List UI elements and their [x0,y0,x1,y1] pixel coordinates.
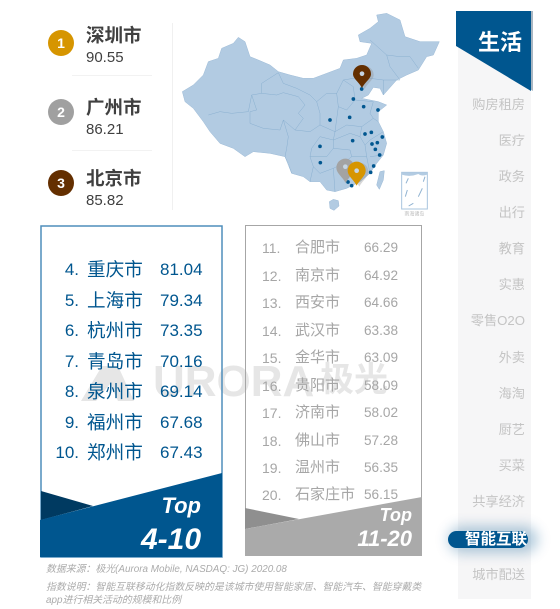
menu item: 零售O2O [471,313,525,328]
active menu pill: 智能互联 [465,531,527,548]
row 8 [65,381,203,402]
pin: Shenzhen [348,162,368,187]
row 6 [65,320,203,341]
menu item: 外卖 [499,350,525,365]
row 12: 64.92 [364,268,398,283]
row 5: 79.34 [160,291,203,310]
active category label: 生活 [478,30,522,55]
row 17 [262,404,398,421]
row 12 [262,267,398,284]
row 18: 佛山市 [295,432,340,449]
row 14 [262,322,398,339]
menu item: 城市配送 [472,567,525,582]
index note: 指数说明：智能互联移动化指数反映的是该城市使用智能家居、智能汽车、智能穿戴类 [46,582,421,593]
source note: 数据来源：极光(Aurora Mobile, NASDAQ: JG) 2020.08 [46,564,287,575]
row 13: 13. [262,295,281,311]
row 16: 16. [262,378,281,394]
index note: app进行相关活动的规模和比例 [46,594,181,606]
rank 3 city: 北京市 [86,168,142,189]
row 6: 73.35 [160,321,203,340]
label: Top: Top [162,493,201,518]
menu item: 买菜 [499,458,525,473]
rank 1 city: 深圳市 [86,25,142,46]
row 13: 64.66 [364,295,398,310]
menu item: 海淘 [499,386,525,401]
row 20: 石家庄市 [295,486,355,503]
rank 1 badge [48,30,74,56]
menu item: 共享经济 [472,494,525,509]
inset: South China Sea: 南海诸岛 [404,211,424,218]
row 8: 8. [65,382,79,401]
menu item: 政务 [499,169,525,184]
row 9: 福州市 [87,412,143,433]
rank 2 badge [48,99,74,125]
row 12: 12. [262,268,281,284]
row 10: 67.43 [160,443,203,462]
menu item: 教育 [499,241,525,256]
active category tab [456,11,533,91]
row 11: 合肥市 [295,239,340,256]
panel: Top 11-20 [245,225,422,556]
row 18: 57.28 [364,433,398,448]
row 16 [262,377,398,394]
menu item: 出行 [499,205,525,220]
row 11: 66.29 [364,240,398,255]
row 12: 南京市 [295,267,340,284]
row 19: 温州市 [295,459,340,476]
row 15: 金华市 [295,349,340,366]
row 4 [65,259,203,280]
row 16: 58.09 [364,378,398,393]
row 9 [65,412,203,433]
map of China [182,13,440,218]
sidebar [456,11,533,599]
row 20 [262,486,398,503]
row 13: 西安市 [295,294,340,311]
row 14: 武汉市 [295,322,340,339]
row 19: 19. [262,460,281,476]
rank 2 city: 广州市 [86,97,142,118]
row 16: 贵阳市 [295,377,340,394]
rank 3 score: 85.82 [86,192,124,209]
rank 2 badge: 2 [57,104,65,120]
row 15 [262,349,398,366]
row 6: 杭州市 [87,320,143,341]
index note [46,582,422,606]
row 13 [262,294,398,311]
watermark [81,357,388,406]
pin: Guangzhou [336,159,354,183]
row 8: 69.14 [160,382,203,401]
row 9: 67.68 [160,413,203,432]
row 11 [262,239,398,256]
row 14: 14. [262,323,281,339]
row 7: 青岛市 [87,351,143,372]
watermark: URORA [153,357,314,406]
label: 4-10: 4-10 [141,523,201,556]
rank 3 badge: 3 [57,175,65,191]
menu item: 医疗 [499,133,525,148]
label: Top: Top [380,505,412,525]
row 20: 20. [262,487,281,503]
row 10 [55,442,203,463]
rank 1 score: 90.55 [86,49,124,66]
panel: top 3 cities [48,25,142,209]
row 4: 81.04 [160,260,203,279]
row 17: 济南市 [295,404,340,421]
row 11: 11. [262,240,280,256]
row 15: 63.09 [364,350,398,365]
inset: South China Sea [402,172,427,218]
pin: Beijing [353,65,374,89]
menu item: 购房租房 [472,97,525,112]
row 9: 9. [65,413,79,432]
menu item: 实惠 [499,277,525,292]
watermark: 极光 [320,361,388,399]
row 14: 63.38 [364,323,398,338]
panel: Top 4-10 [40,225,223,558]
row 7: 70.16 [160,352,203,371]
row 4: 重庆市 [87,259,143,280]
row 20: 56.15 [364,487,398,502]
menu item: 厨艺 [499,422,525,437]
rank 2 score: 86.21 [86,121,124,138]
row 4: 4. [65,260,79,279]
rank 3 badge [48,170,74,196]
row 10: 郑州市 [87,442,143,463]
row 18: 18. [262,433,281,449]
row 18 [262,432,398,449]
row 5: 上海市 [87,290,143,311]
row 6: 6. [65,321,79,340]
label: 11-20: 11-20 [357,526,412,551]
row 17: 58.02 [364,405,398,420]
row 19 [262,459,398,476]
row 8: 泉州市 [87,381,143,402]
row 5 [65,290,203,311]
row 7: 7. [65,352,79,371]
row 7 [65,351,203,372]
row 10: 10. [55,443,79,462]
row 19: 56.35 [364,460,398,475]
row 15: 15. [262,350,281,366]
row 5: 5. [65,291,79,310]
rank 1 badge: 1 [57,35,65,51]
row 17: 17. [262,405,281,421]
